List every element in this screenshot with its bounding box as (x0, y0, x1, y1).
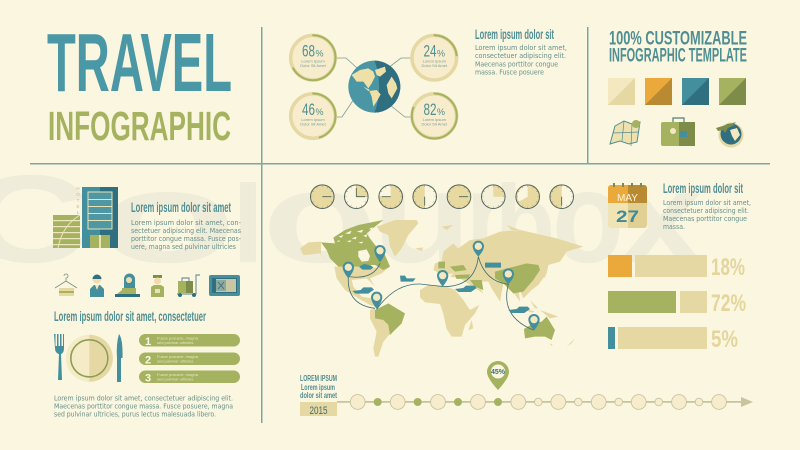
text block: top middle: Lorem ipsum dolor sit amet, (475, 43, 567, 52)
icon: hanger (55, 274, 77, 296)
bar: 5%: 5% (711, 326, 738, 353)
icon: hotel building: T (77, 198, 80, 203)
donut: 68%: % (316, 49, 324, 59)
icon: calendar (608, 183, 647, 228)
text block: top middle (475, 27, 567, 76)
routes (377, 257, 533, 330)
donut: 24%: 24 (424, 42, 436, 61)
icon: calendar: MAY (617, 193, 638, 204)
hotel text: Lorem ipsum dolor sit amet (131, 200, 231, 215)
clock 5 (447, 185, 471, 208)
restaurant heading: Lorem ipsum dolor sit amet, consectetuer (54, 309, 206, 324)
donut: 68%: Dolor Sit Amet (300, 63, 327, 68)
map: eurasia, africa, oceania (377, 225, 583, 347)
restaurant paragraph: Lorem ipsum dolor sit amet, consectetuer adipiscing elit. (54, 394, 233, 402)
pill 3: sed pulvinar ultricies. (157, 376, 194, 382)
icon: plate (66, 335, 113, 382)
watermark: o (262, 144, 377, 290)
donut: 68%: 68 (302, 42, 315, 61)
text block: calendar: Maecenas porttitor congue (663, 214, 747, 223)
watermark: o (97, 144, 237, 290)
icon: luggage cart (177, 275, 200, 297)
icon: hotel building: L (77, 210, 80, 215)
clock 3 (379, 185, 403, 208)
text block: calendar: Lorem ipsum dolor sit amet, (663, 198, 751, 207)
restaurant paragraph: Maecenas porttitor congue massa. Fusce posuere, magna (54, 402, 233, 410)
clock 4 (413, 185, 437, 208)
text block: calendar: consectetuer adipiscing elit. (663, 206, 749, 215)
pill 1 (139, 334, 240, 348)
pill 2: Fusce posuere, magna (157, 354, 199, 359)
timeline label: 2015 (310, 405, 328, 417)
pill 1: sed pulvinar ultricies. (157, 340, 194, 345)
bar chart (608, 254, 746, 353)
hotel text: sectetuer adipiscing elit. Maecenas (131, 226, 241, 235)
timeline nodes (350, 395, 726, 409)
timeline label: dolor sit amet (300, 391, 337, 400)
pill 3: 3 (145, 372, 151, 384)
panel: restaurant (54, 309, 240, 418)
clock 8 (550, 185, 574, 208)
pills list (139, 334, 240, 384)
title: INFOGRAPHIC (48, 103, 231, 149)
donut: 82%: Lorem Ipsum (423, 117, 447, 122)
timeline (300, 361, 753, 417)
clock 1 (310, 185, 334, 208)
heading: customizable template (609, 28, 747, 66)
watermark: o (552, 144, 624, 290)
donut: 24%: Dolor Sit Amet (422, 63, 448, 68)
timeline label: LOREM IPSUM (300, 374, 337, 383)
hotel text: uere, magna sed pulvinar ultricies (131, 242, 236, 251)
arctic gaps and hudson bay (337, 227, 373, 262)
bar: 18%: 18% (711, 254, 745, 281)
text block: top middle: Lorem ipsum dolor sit (475, 27, 554, 42)
icon: hotel building: H (76, 186, 80, 191)
icon: hotel building: E (76, 204, 80, 209)
pins (343, 245, 386, 309)
watermark: u (372, 144, 472, 290)
transport icons (352, 264, 416, 294)
donut: 68% (290, 35, 336, 80)
map: americas (300, 220, 423, 357)
panel: globe percentages (290, 35, 457, 139)
icon: receptionist (115, 274, 140, 297)
icon: bellhop (151, 275, 164, 297)
watermark (0, 144, 703, 290)
donut: 46%: Lorem Ipsum (301, 117, 325, 122)
text block: calendar (663, 181, 751, 231)
text block: top middle: Maecenas porttitor congue (475, 60, 558, 68)
pill 1: Fusce posuere, magna (157, 336, 199, 340)
pill 2: 2 (145, 354, 151, 366)
clock 7 (516, 185, 540, 208)
icon: hotel building (53, 186, 118, 248)
restaurant paragraph: sed pulvinar ultricies, purus lectus malesuada libero. (54, 410, 216, 418)
watermark: b (495, 163, 555, 286)
connector lines (332, 58, 415, 117)
restaurant paragraph (54, 394, 233, 418)
hotel text: porttitor congue massa. Fusce pos- (131, 234, 241, 243)
icon: calendar: 27 (616, 207, 639, 226)
donut: 24% (412, 35, 457, 80)
pill 2: sed pulvinar ultricies. (157, 358, 194, 364)
donut: 82%: 82 (424, 100, 436, 119)
watermark: l (232, 163, 264, 286)
hotel text: Lorem ipsum dolor sit amet, con- (131, 218, 241, 227)
hotel text (131, 200, 241, 251)
title (47, 16, 232, 149)
donut: 82%: % (437, 107, 445, 117)
donut: 46%: 46 (302, 100, 315, 119)
donut: 46%: Dolor Sit Amet (300, 121, 327, 126)
pill 1: 1 (145, 336, 151, 348)
donut: 46% (290, 94, 336, 138)
bar: 72%: 72% (711, 290, 746, 317)
timeline label: Lorem ipsum (301, 383, 335, 392)
watermark: r (466, 144, 506, 290)
timeline label (300, 374, 337, 417)
donut: 46%: % (316, 107, 324, 117)
icon: person (90, 274, 104, 297)
icon: globe (348, 61, 400, 113)
transport icons (455, 263, 530, 313)
routes (348, 263, 380, 308)
donut: 68%: Lorem Ipsum (301, 58, 325, 64)
icon: hotel building: O (76, 192, 80, 197)
clock 6 (482, 185, 505, 208)
donut: 82% (412, 94, 457, 138)
timeline axis (337, 397, 753, 407)
text block: calendar: massa. (663, 222, 685, 231)
pill 3 (139, 370, 240, 384)
donut: 24%: Lorem Ipsum (423, 58, 447, 64)
text block: top middle: consectetuer adipiscing elit. (475, 51, 566, 60)
panel: hotel (53, 186, 241, 297)
clocks row (310, 185, 574, 208)
colour swatches (608, 78, 746, 105)
pins (437, 241, 540, 331)
donut: 24%: % (437, 49, 445, 59)
icon: suitcase (661, 118, 695, 146)
clock 2 (344, 185, 368, 208)
donut: 82%: Dolor Sit Amet (422, 121, 448, 126)
pill 3: Fusce posuere, magna (157, 372, 199, 377)
icon: knife (117, 334, 123, 382)
title: TRAVEL (47, 16, 232, 109)
text block: top middle: massa. Fusce posuere (475, 68, 545, 76)
icon: globe with plane (716, 122, 744, 148)
icon: map (610, 120, 640, 146)
timeline pin: 45% (487, 361, 509, 390)
chart: world map (300, 220, 583, 357)
watermark: x (618, 144, 703, 290)
timeline pin: 45%: 45% (491, 369, 506, 376)
icon: fork (54, 334, 64, 380)
icon: safe (209, 275, 240, 296)
pill 2 (139, 352, 240, 366)
